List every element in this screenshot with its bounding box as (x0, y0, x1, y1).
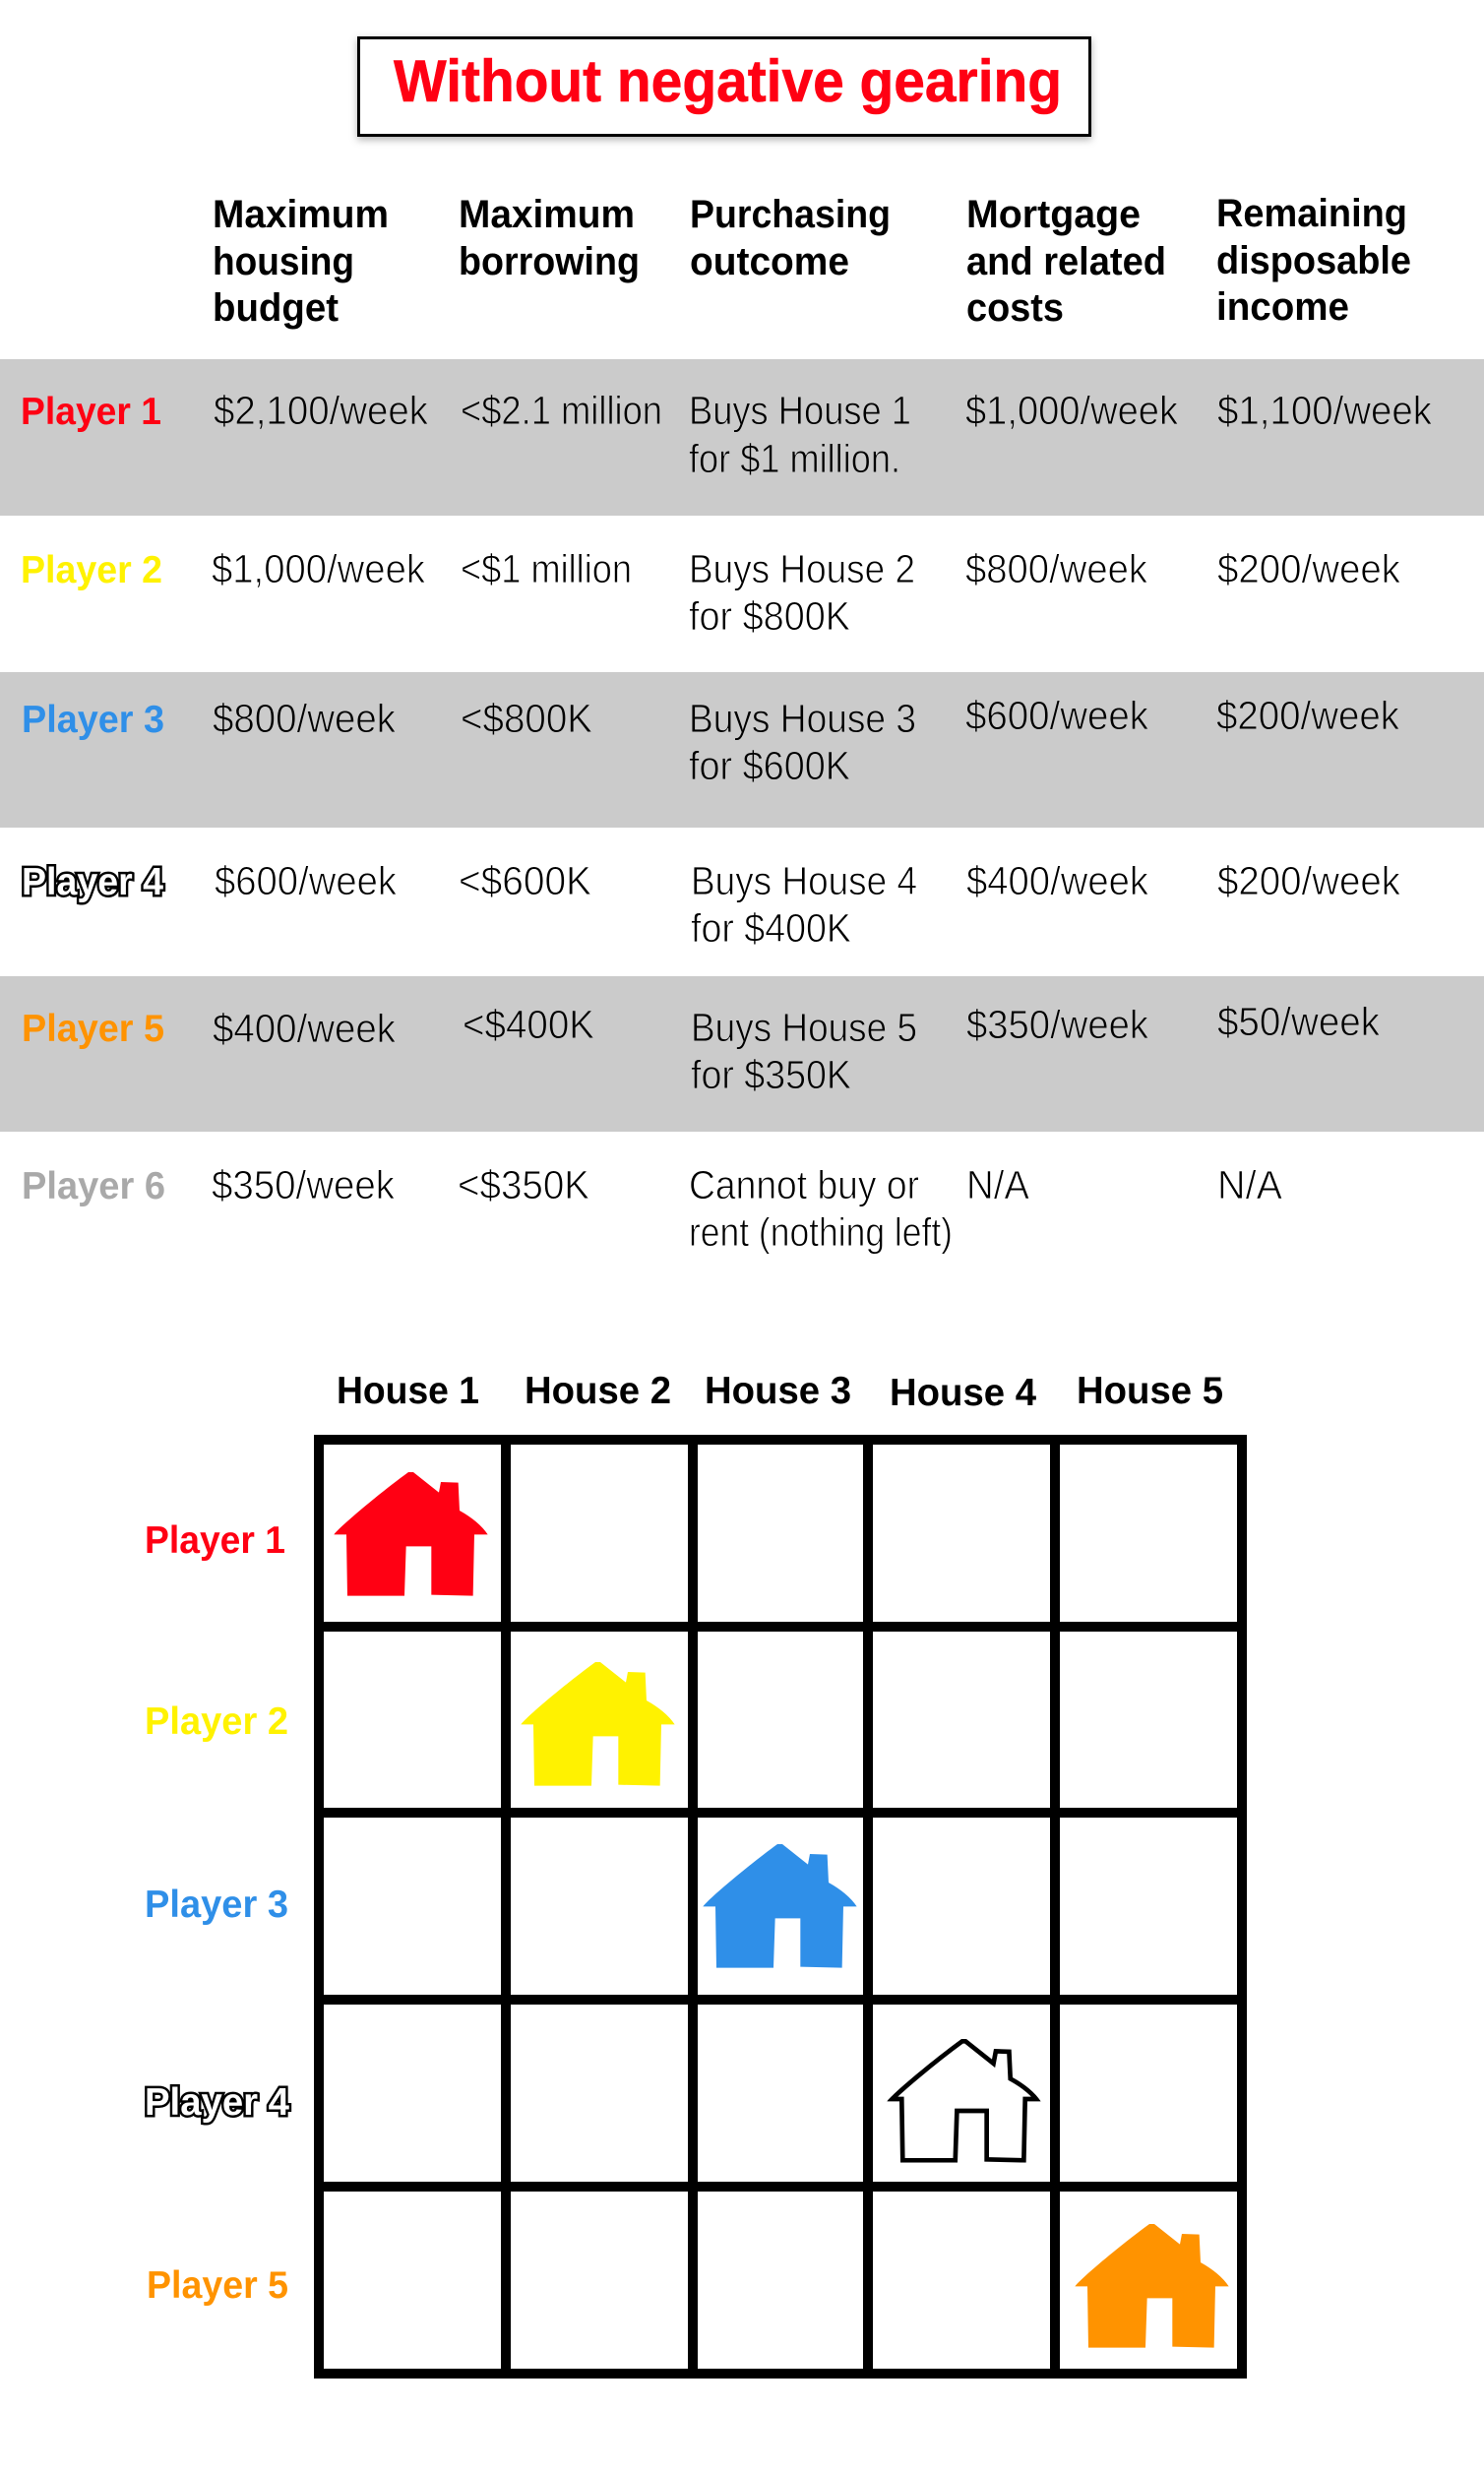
budget: $800/week (213, 696, 396, 741)
table row: player 2 (21, 546, 1400, 639)
table row: player 1 (0, 359, 1484, 516)
header: purchasing outcome: outcome (690, 240, 849, 283)
label: house 1: House 1 (337, 1370, 479, 1412)
label: player 3: Player 3 (22, 699, 164, 741)
header: mortgage and related costs: costs (966, 286, 1064, 330)
borrowing: <$800K (461, 696, 592, 741)
budget: $2,100/week (214, 388, 428, 433)
player row labels (145, 1519, 289, 2307)
purchase outcome: for $1 million. (689, 436, 900, 481)
label: player 4: Player 4 (22, 861, 163, 903)
header: remaining disposable income: income (1216, 285, 1349, 329)
title (358, 37, 1090, 136)
mortgage costs: $800/week (965, 546, 1147, 591)
budget: $400/week (213, 1006, 396, 1051)
icon: blue house, player 3 (703, 1844, 857, 1968)
remaining income: $50/week (1217, 999, 1380, 1044)
label: player 4: Player 4 (145, 2081, 289, 2124)
label: player 5: Player 5 (22, 1008, 164, 1050)
label: house 4: House 4 (890, 1372, 1036, 1414)
remaining income: $200/week (1216, 693, 1399, 738)
remaining income: $1,100/week (1217, 388, 1432, 433)
borrowing: <$400K (463, 1002, 594, 1047)
title: Without negative gearing (394, 48, 1062, 114)
header: maximum housing budget: budget (213, 286, 339, 330)
mortgage costs: $350/week (966, 1002, 1148, 1047)
purchase outcome: for $800K (689, 593, 850, 639)
table row: player 4 (22, 858, 1400, 951)
header: mortgage and related costs: and related (966, 240, 1166, 283)
purchase outcome: Buys House 2 (689, 546, 915, 591)
borrowing: <$1 million (461, 546, 632, 591)
mortgage costs: $400/week (966, 858, 1148, 903)
mortgage costs: N/A (966, 1162, 1030, 1207)
purchase outcome: rent (nothing left) (689, 1209, 953, 1255)
mortgage costs: $1,000/week (965, 388, 1178, 433)
purchase outcome: Buys House 3 (689, 696, 916, 741)
purchase outcome: for $350K (691, 1052, 851, 1097)
budget: $1,000/week (212, 546, 425, 591)
label: house 2: House 2 (525, 1370, 671, 1412)
ownership grid (314, 1435, 1247, 2379)
remaining income: $200/week (1217, 858, 1400, 903)
table row: player 5 (0, 976, 1484, 1132)
header: maximum borrowing: borrowing (459, 240, 640, 283)
mortgage costs: $600/week (965, 693, 1148, 738)
header: mortgage and related costs: Mortgage (966, 193, 1141, 236)
label: house 5: House 5 (1077, 1370, 1223, 1412)
table row: player 6 (22, 1162, 1283, 1255)
purchase outcome: for $400K (691, 905, 851, 951)
label: player 3: Player 3 (145, 1884, 288, 1926)
borrowing: <$600K (459, 858, 591, 903)
label: player 5: Player 5 (147, 2264, 288, 2307)
table column headers (213, 192, 1411, 330)
icon: yellow house, player 2 (521, 1662, 675, 1786)
table row: player 3 (0, 672, 1484, 828)
header: maximum housing budget: Maximum (213, 193, 389, 236)
purchase outcome: Cannot buy or (689, 1162, 919, 1207)
label: player 2: Player 2 (145, 1700, 288, 1743)
label: player 1: Player 1 (145, 1519, 285, 1562)
house column labels (337, 1370, 1223, 1414)
header: maximum borrowing: Maximum (459, 193, 635, 236)
remaining income: N/A (1217, 1162, 1283, 1207)
purchase outcome: Buys House 1 (689, 388, 911, 433)
budget: $600/week (215, 858, 397, 903)
header: maximum housing budget: housing (213, 240, 354, 283)
purchase outcome: Buys House 5 (691, 1005, 917, 1050)
icon: red house, player 1 (334, 1472, 488, 1596)
budget: $350/week (212, 1162, 395, 1207)
label: player 1: Player 1 (21, 391, 161, 433)
purchase outcome: Buys House 4 (691, 858, 917, 903)
label: player 6: Player 6 (22, 1165, 165, 1207)
label: house 3: House 3 (705, 1370, 851, 1412)
label: player 2: Player 2 (21, 549, 162, 591)
header: remaining disposable income: disposable (1216, 239, 1411, 282)
header: purchasing outcome: Purchasing (690, 193, 891, 236)
borrowing: <$2.1 million (461, 388, 662, 433)
icon: orange house, player 5 (1075, 2224, 1229, 2348)
header: remaining disposable income: Remaining (1216, 192, 1407, 235)
icon: outlined house, player 4 (887, 2039, 1041, 2163)
purchase outcome: for $600K (689, 743, 850, 788)
borrowing: <$350K (458, 1162, 589, 1207)
remaining income: $200/week (1217, 546, 1400, 591)
